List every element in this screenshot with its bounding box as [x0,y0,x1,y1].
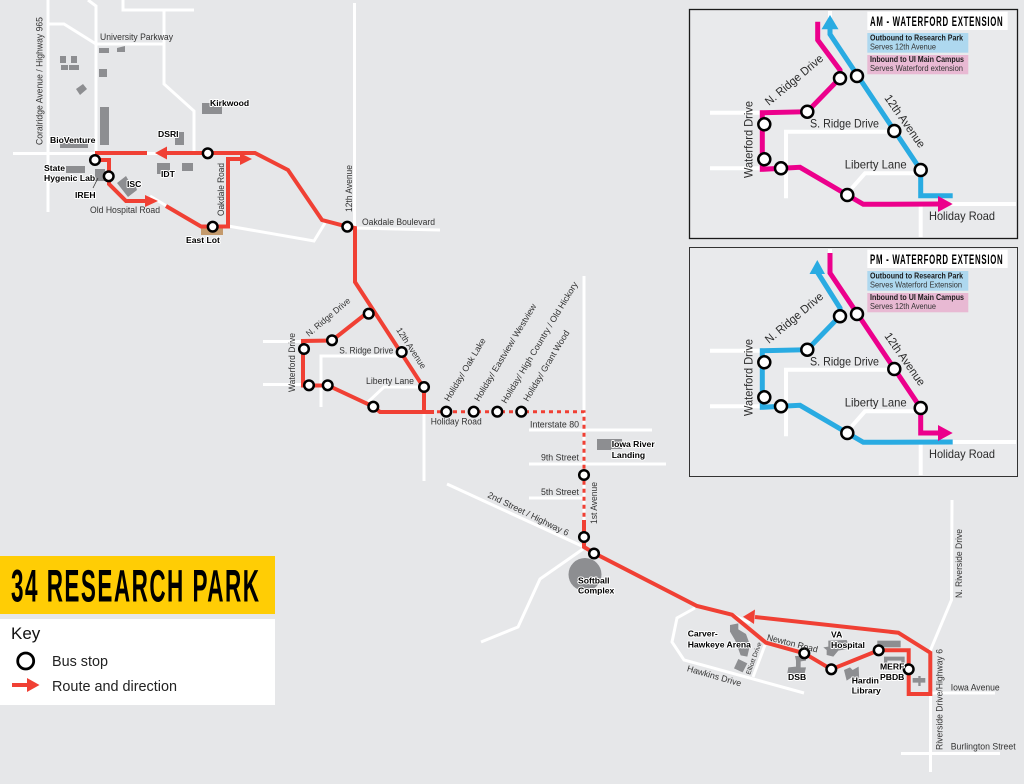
street label: 12th Avenue [394,326,428,371]
street labels: S. Ridge Drive [810,356,879,369]
street label: Elliott Drive [745,641,764,676]
place label: State [44,163,65,173]
street labels: Holiday Road [929,210,995,223]
legend: outbound [867,33,968,53]
street label: Old Hospital Road [90,205,160,215]
place label: DSB [788,672,806,682]
place label: ISC [127,179,141,189]
inbound route [762,22,953,212]
legend: inbound: Serves 12th Avenue [870,302,936,311]
place label: Hygenic Lab [44,173,95,183]
street label: Liberty Lane [366,376,414,386]
street label: Waterford Drive [287,333,297,392]
street label: Iowa Avenue [951,682,1000,692]
title: 34 RESEARCH PARK [11,561,259,612]
street labels: Holiday Road [929,448,995,461]
place label: Hospital [831,640,865,650]
street label: Interstate 80 [530,420,579,430]
bus route [95,146,930,694]
street labels: S. Ridge Drive [810,118,879,131]
street label: 2nd Street / Highway 6 [486,490,571,538]
street label: Oakdale Road [216,163,226,216]
place label: IDT [161,169,176,179]
outbound route [762,260,953,442]
street label: 1st Avenue [589,482,599,524]
place label: Library [852,686,881,696]
legend: outbound: Serves 12th Avenue [870,42,936,52]
place label: IREH [75,190,96,200]
place label: PBDB [880,672,904,682]
key: route label: Route and direction [52,679,177,695]
key heading: Key [11,624,41,643]
legend: outbound [867,271,968,291]
place label: DSRI [158,129,179,139]
place label: Landing [612,450,645,460]
street label: Coralridge Avenue / Highway 965 [35,17,45,145]
panel title: AM - WATERFORD EXTENSION [870,15,1003,30]
street labels: N. Ridge Drive [763,52,826,108]
street labels: 12th Avenue [882,92,928,151]
street label: N. Riverside Drive [954,529,964,598]
panel title: PM - WATERFORD EXTENSION [870,253,1003,268]
place label: Carver- [688,629,718,639]
legend: outbound: Serves Waterford Extension [870,280,962,290]
stops [758,308,927,439]
street labels: Waterford Drive [743,339,756,416]
legend: inbound: Inbound to UI Main Campus [870,55,964,64]
stop label: Holiday/ High Country / Old Hickory [499,279,580,405]
panel: AM Waterford extension [690,10,1018,238]
place label: Hawkeye Arena [688,639,751,649]
key: bus stop label: Bus stop [52,654,108,670]
street label: 12th Avenue [344,165,354,212]
street label: 9th Street [541,452,580,462]
legend: inbound [867,293,968,312]
stop label: Holiday/ Grant Wood [521,328,571,403]
legend: inbound: Inbound to UI Main Campus [870,293,964,302]
panel roads [710,11,1016,237]
street label: 5th Street [541,487,580,497]
stops [758,70,927,201]
stop label: Holiday/ Oak Lake [442,336,488,403]
key: route arrow [12,678,40,692]
street labels: 12th Avenue [882,330,928,389]
street labels: Waterford Drive [743,101,756,178]
place label: Complex [578,586,615,596]
street labels: Liberty Lane [845,396,907,410]
street labels [743,52,995,223]
legend: outbound: Outbound to Research Park [870,272,963,280]
key: bus stop icon [18,653,34,669]
street labels: N. Ridge Drive [763,290,826,346]
street label: S. Ridge Drive [339,346,393,356]
street label: University Parkway [100,32,174,42]
key panel [0,619,275,705]
place label: Kirkwood [210,98,249,108]
street label: Newton Road [766,632,819,655]
legend: outbound: Outbound to Research Park [870,34,963,42]
place label: MERF [880,661,904,671]
campus buildings [60,46,925,686]
street label: Oakdale Boulevard [362,217,435,227]
panel: PM Waterford extension [690,248,1018,476]
stop label: Holiday/ Eastview/ Westview [472,301,539,403]
place label: East Lot [186,235,220,245]
street label: Burlington Street [951,742,1016,752]
place label: BioVenture [50,135,96,145]
street label: Riverside Drive/Highway 6 [934,649,944,750]
bus stops [90,148,913,674]
outbound route [822,15,953,196]
place label: Iowa River [612,439,655,449]
inbound route [830,253,953,441]
street labels [743,290,995,461]
panel roads [710,249,1016,475]
street label: N. Ridge Drive [304,295,352,339]
street label: Holiday Road [431,416,482,426]
legend: inbound [867,55,968,74]
legend: inbound: Serves Waterford extension [870,64,963,73]
place label: Softball [578,576,610,586]
place label: VA [831,630,842,640]
street labels: Liberty Lane [845,158,907,172]
title banner [0,556,275,614]
street label: Hawkins Drive [686,663,743,688]
place label: Hardin [852,676,879,686]
